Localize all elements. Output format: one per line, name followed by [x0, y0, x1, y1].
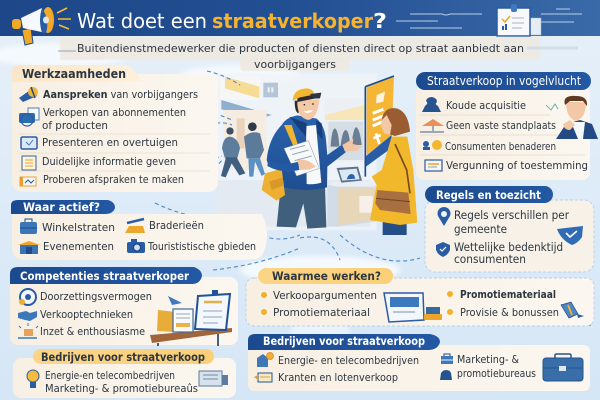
row: koude acquisitie: Koude acquisitie — [446, 99, 526, 112]
icon: light bulb — [27, 370, 39, 388]
row: regels — [454, 209, 569, 236]
panel: straatverkoop in vogelvlucht — [416, 72, 598, 180]
icon: bag — [440, 370, 452, 380]
salesman — [262, 88, 362, 229]
icon: target — [19, 289, 36, 305]
banner — [365, 76, 394, 177]
icon: clipboard header — [497, 4, 541, 36]
illustration: street scene with salesman and customer — [217, 73, 417, 235]
heading: waarmee werken: Waarmee werken? — [272, 269, 381, 283]
icon: megaphone small — [19, 87, 38, 102]
panel: regels en toezicht — [425, 186, 594, 272]
row: aanspreken: Aanspreken van vorbijgangers — [43, 88, 198, 101]
panel: bedrijven rechts — [248, 334, 590, 391]
icon: presentation — [21, 137, 37, 149]
icon: information sheet — [22, 156, 36, 170]
icon: documents — [199, 371, 228, 386]
heading: competenties: Competenties straatverkoper — [20, 269, 189, 283]
icon: shield small — [436, 242, 450, 257]
subtitle — [58, 37, 578, 71]
heading: bedrijven links: Bedrijven voor straatverkoop — [41, 350, 205, 364]
icon: enthusiasm — [18, 323, 38, 338]
icon: market stall — [420, 119, 444, 132]
bullet — [447, 291, 453, 297]
row: wettelijke — [454, 241, 563, 266]
heading: werkzaamheden: Werkzaamheden — [22, 67, 126, 81]
row: marketing rechts: promotiebureaus — [457, 367, 536, 380]
bullet — [261, 292, 267, 298]
icon: promotion screen — [384, 293, 442, 322]
row: geen vaste standplaats: Geen vaste standplaats — [446, 119, 556, 132]
row: provisie: Provisie & bonussen — [460, 306, 559, 319]
icon: megaphone — [12, 7, 71, 45]
row: presenteren: Presenteren en overtuigen — [42, 136, 178, 149]
icon: appointment — [20, 177, 36, 186]
icon: small case — [441, 354, 453, 364]
row: touristische: Tourististische gbieden — [147, 240, 256, 253]
icon: subscriptions — [19, 108, 39, 126]
icon: cold acquisition — [422, 97, 441, 112]
row: kranten: Kranten en lotenverkoop — [278, 371, 398, 384]
pedestrian left — [221, 127, 245, 177]
row: verkopen: of producten — [42, 119, 108, 132]
row: verkooptechnieken: Verkooptechnieken — [40, 308, 133, 321]
icon: ticket — [254, 373, 272, 382]
row: wettelijke: consumenten — [454, 253, 526, 266]
subtitle: Buitendienstmedewerker die producten of diensten direct op straat aanbiedt aan — [77, 42, 524, 55]
title — [77, 9, 387, 33]
pedestrian right — [244, 122, 265, 177]
icon: camera — [127, 239, 145, 253]
icon: permit — [425, 160, 442, 171]
row: verkopen: Verkopen van abonnementen — [43, 106, 186, 119]
table — [327, 167, 376, 227]
row: wettelijke: Wettelijke bedenktijd — [454, 241, 563, 254]
illustration: desk with clipboard — [150, 290, 232, 346]
icon: shopping street — [20, 219, 37, 234]
customer — [370, 108, 417, 235]
dashed route lines — [155, 71, 593, 326]
row: proberen: Proberen afspraken te maken — [43, 173, 184, 186]
row: duidelijke: Duidelijke informatie geven — [42, 155, 176, 168]
row: marketing rechts: Marketing- & — [457, 353, 520, 366]
icon: pencil — [561, 302, 584, 318]
row: doorzettingsvermogen: Doorzettingsvermogen — [40, 290, 152, 303]
row: energie rechts: Energie- en telecombedrijven — [278, 354, 419, 367]
row: winkelstraten: Winkelstraten — [42, 221, 115, 234]
row: promotiemateriaal rechts: Promotiemateriaal — [460, 288, 556, 301]
panel: waarmee werken — [246, 268, 594, 326]
row: verkoopargumenten: Verkoopargumenten — [273, 289, 377, 302]
row: marketing rechts — [457, 353, 536, 380]
subtitle: voorbijgangers — [254, 58, 336, 71]
bullet — [261, 309, 267, 315]
icon: shield large — [557, 226, 583, 245]
row: promotiemateriaal: Promotiemateriaal — [273, 306, 370, 319]
heading: straatverkoop: Straatverkoop in vogelvlucht — [427, 74, 581, 88]
row: evenementen: Evenementen — [43, 240, 114, 253]
panel: competenties — [10, 267, 238, 346]
panel: bedrijven links — [13, 349, 236, 398]
icon: fair — [125, 219, 145, 233]
icon: energy house — [257, 352, 274, 367]
row: energie: Energie-en telecombedrijven — [45, 369, 175, 382]
row: consumenten: Consumenten benaderen — [445, 140, 556, 153]
heading: bedrijven rechts: Bedrijven voor straatverkoop — [263, 334, 425, 348]
bullet — [447, 309, 453, 315]
icon: location pin — [438, 207, 451, 226]
panel: werkzaamheden — [12, 65, 218, 192]
row: braderieen: Braderieën — [149, 219, 204, 232]
row: inzet: Inzet & enthousiasme — [40, 325, 145, 338]
row: regels: Regels verschillen per — [454, 209, 569, 222]
title: ? — [373, 9, 387, 33]
heading: waar actief: Waar actief? — [23, 200, 100, 214]
illustration: thinking man — [546, 96, 598, 139]
icon: handshake — [18, 311, 37, 321]
row: verkopen — [42, 106, 186, 132]
icon: consumers — [423, 140, 442, 150]
header band — [0, 0, 600, 36]
heading: regels en toezicht: Regels en toezicht — [436, 188, 541, 202]
icon: events — [18, 241, 40, 254]
icon: briefcase — [543, 354, 583, 381]
row: marketing: Marketing- & promotiebureaûs — [45, 382, 198, 395]
row: vergunning: Vergunning of toestemming — [446, 159, 588, 172]
title: Wat doet een — [77, 9, 207, 33]
panel: waar actief — [11, 200, 267, 260]
title: straatverkoper — [212, 9, 373, 33]
row: regels: gemeente — [454, 223, 507, 236]
